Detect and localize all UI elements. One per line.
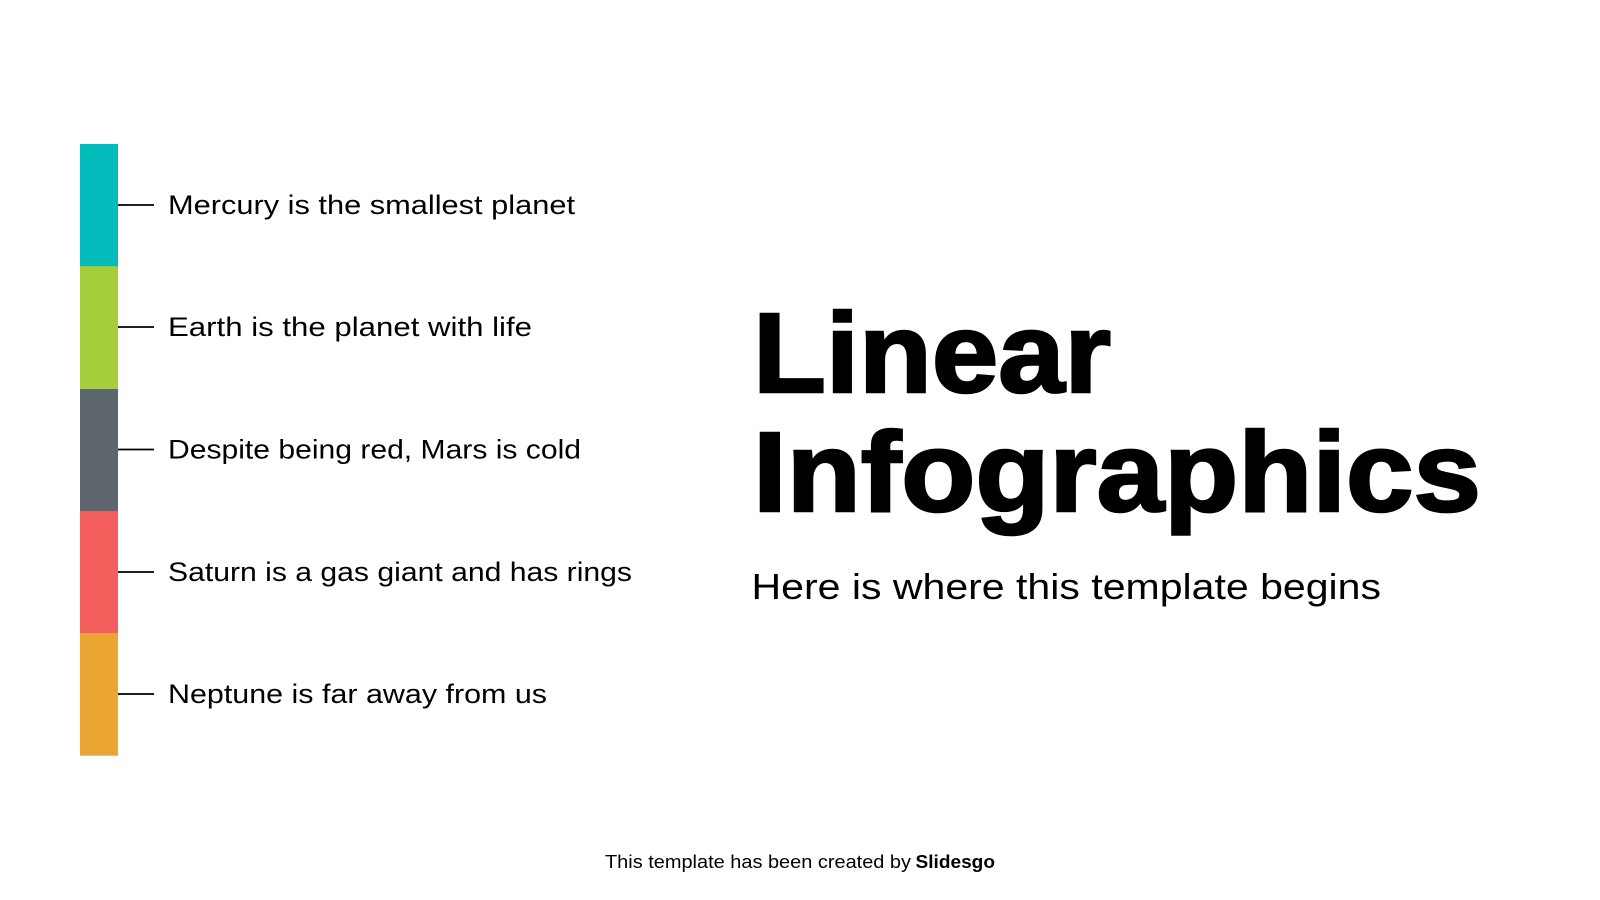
title: Infographics bbox=[753, 409, 1481, 535]
linear infographic bbox=[80, 144, 632, 756]
step 2: Earth bbox=[80, 266, 532, 389]
step 3: Mars: Despite being red, Mars is cold bbox=[168, 434, 581, 464]
step 4: Saturn bbox=[80, 511, 632, 633]
step 5: Neptune bbox=[80, 633, 547, 756]
step 1: Mercury: Mercury is the smallest planet bbox=[168, 190, 576, 220]
footer credit: Slidesgo bbox=[916, 851, 995, 872]
step 3: Mars bbox=[80, 389, 581, 511]
footer credit: This template has been created by bbox=[605, 851, 912, 872]
title bbox=[753, 290, 1481, 535]
step 5: Neptune: Neptune is far away from us bbox=[168, 679, 547, 709]
subtitle: Here is where this template begins bbox=[752, 566, 1381, 607]
step 1: Mercury bbox=[80, 144, 576, 266]
step 4: Saturn: Saturn is a gas giant and has rings bbox=[168, 557, 632, 587]
title: Linear bbox=[753, 290, 1111, 416]
step 2: Earth: Earth is the planet with life bbox=[168, 312, 532, 342]
